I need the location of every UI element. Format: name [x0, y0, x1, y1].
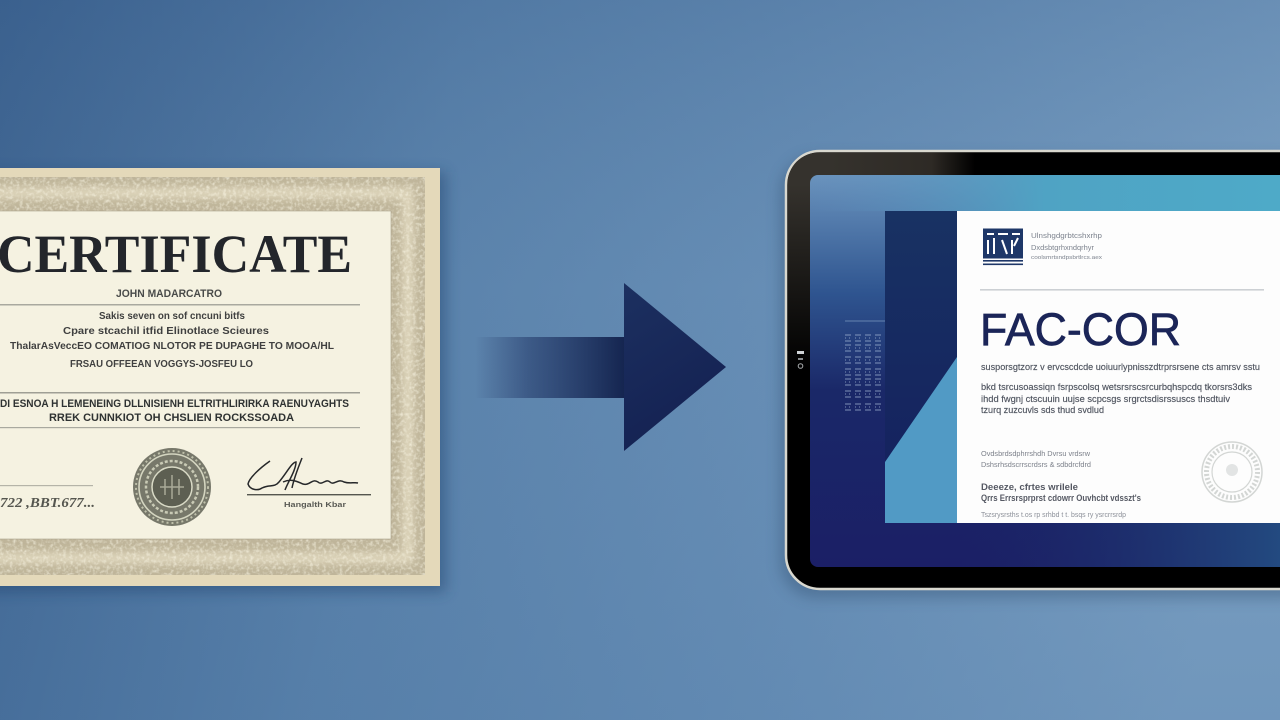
document signatory: Qrrs Errsrsprprst cdowrr Ouvhcbt vdsszt's: [981, 493, 1141, 503]
certificate body text: FRSAU OFFEEAN VOGGYS-JOSFEU LO: [70, 358, 253, 370]
signature: [247, 458, 371, 509]
certificate statement text: RREK CUNNKIOT OH CHSLIEN ROCKSSOADA: [49, 412, 294, 424]
tablet: [780, 151, 1280, 598]
certificate statement text: DI ESNOA H LEMENEING DLLNISIENH ELTRITHLIRIRKA RAENUYAGHTS: [0, 398, 349, 410]
certificate title: CERTIFICATE: [0, 224, 352, 284]
signature: Hangalth Kbar: [284, 500, 346, 509]
document signatory: Tszsrysrsths t.os rp srhbd t t. bsqs ry ysrcrrsrdp: [981, 512, 1126, 519]
document details: [981, 449, 1091, 469]
date line: 722 ,BBT.677...: [0, 496, 95, 511]
document body text: susporsgtzorz v ervcscdcde uoiuurlypnisszdtrprsrsene cts amrsv sstu: [981, 362, 1260, 372]
recipient name: JOHN MADARCATRO: [116, 288, 222, 300]
document issuer text: coolsmrtsndpsbrtlrcs.aex: [1031, 255, 1102, 261]
document issuer text: Ulnshgdgrbtcshxrhp: [1031, 233, 1102, 240]
decorative data column: [845, 320, 885, 410]
document signatory: [981, 482, 1141, 519]
navy side panel: [885, 211, 957, 523]
certificate statement text: [0, 398, 349, 424]
ornate border: [0, 177, 425, 575]
date line: [0, 485, 95, 511]
document issuer text: Dxdsbtgrhxndqrhyr: [1031, 245, 1095, 252]
document details: Dshsrhsdscrrscrdsrs & sdbdrcfdrd: [981, 460, 1091, 469]
light blue panel: [885, 357, 957, 523]
document body text: ihdd fwgnj ctscuuin uujse scpcsgs srgrctsdisrssuscs thsdtuiv: [981, 394, 1231, 404]
screen: [810, 175, 1280, 567]
tablet top bezel sheen: [788, 152, 975, 187]
camera: [797, 351, 804, 368]
certificate inner panel: [0, 211, 391, 539]
certificate body text: [10, 310, 335, 370]
certificate rule 2: [0, 392, 360, 394]
arrow: [475, 283, 726, 451]
digital seal: [1202, 442, 1262, 502]
digital document: [957, 211, 1280, 523]
certificate body text: Sakis seven on sof cncuni bitfs: [99, 310, 245, 322]
certificate body text: ThalarAsVeccEO COMATIOG NLOTOR PE DUPAGHE TO MOOA/HL: [10, 340, 335, 352]
document body text: bkd tsrcusoassiqn fsrpscolsq wetsrsrscsrcurbqhspcdq tkorsrs3dks: [981, 382, 1253, 392]
tablet frame: [786, 151, 1280, 589]
paper certificate: [0, 168, 446, 592]
document rule: [980, 289, 1264, 291]
certificate rule 1: [0, 304, 360, 306]
document signatory: Deeeze, cfrtes wrilele: [981, 482, 1078, 492]
document logo: [983, 228, 1023, 265]
document issuer text: [1031, 233, 1102, 261]
document body text: tzurq zuzcuvls sds thud svdlud: [981, 405, 1104, 415]
embossed seal: [133, 448, 211, 526]
tablet left bezel sheen: [788, 185, 810, 370]
document details: Ovdsbrdsdphrrshdh Dvrsu vrdsrw: [981, 449, 1091, 458]
document title: FAC-COR: [980, 304, 1181, 355]
certificate body text: Cpare stcachil itfid Elinotlace Scieures: [63, 325, 269, 337]
certificate paper sheet: [0, 168, 440, 586]
certificate rule 3: [0, 427, 360, 428]
document body text: [981, 362, 1260, 415]
